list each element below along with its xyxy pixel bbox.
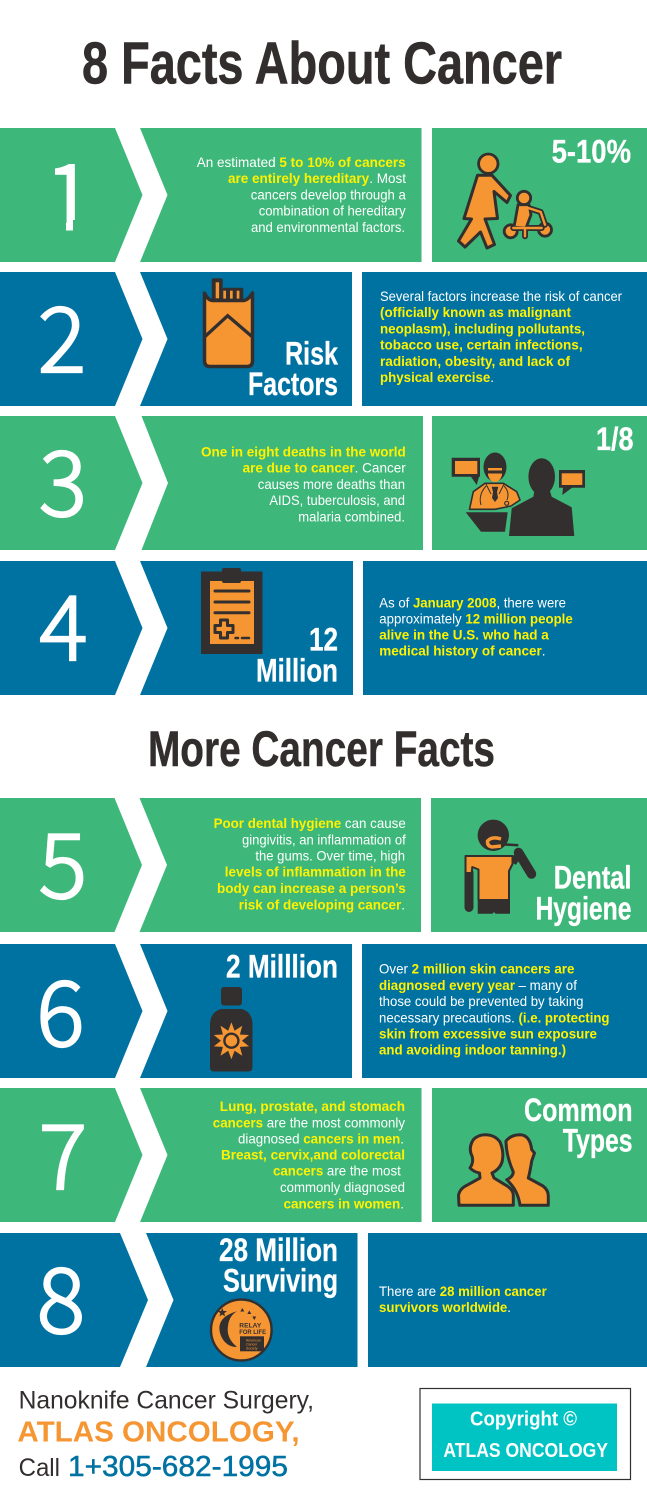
footer: contact details: Call: [19, 1454, 60, 1482]
text block: fact 7: [140, 1088, 422, 1222]
text block: fact 6: skin from excessive sun exposure: [379, 1026, 597, 1042]
stat panel: 1/8: [432, 416, 647, 550]
text block: fact 6: diagnosed every year – many of: [379, 977, 577, 993]
text block: fact 3: [142, 416, 423, 550]
icon: sunscreen bottle: [210, 987, 252, 1072]
copyright box: [420, 1388, 630, 1480]
icon: relay for life badge: RELAY: [239, 1322, 262, 1329]
text block: fact 5: risk of developing cancer.: [239, 896, 405, 912]
number 3 arrow: 3: [39, 412, 87, 542]
stat panel: 5-10%: 5-10%: [552, 134, 631, 170]
panel: fact 3: [0, 412, 647, 550]
copyright box: ATLAS ONCOLOGY: [443, 1440, 609, 1462]
text block: fact 1: and environmental factors.: [251, 219, 405, 235]
number 5 arrow: 5: [39, 794, 87, 924]
heading panel: 28 million surviving: 28 Million: [219, 1232, 338, 1268]
text block: fact 3: AIDS, tuberculosis, and: [269, 492, 405, 508]
text block: fact 8: [368, 1233, 647, 1367]
icon: relay for life badge: Society: [246, 1346, 258, 1350]
footer: contact details: ATLAS ONCOLOGY,: [17, 1417, 300, 1449]
icon: medical clipboard: [201, 568, 262, 654]
text block: fact 5: Poor dental hygiene can cause: [214, 815, 406, 831]
icon: relay for life badge: American: [246, 1338, 261, 1342]
panel: fact 5: [0, 794, 647, 932]
heading panel: 12 million: Million: [256, 653, 338, 689]
text block: fact 1: are entirely hereditary. Most: [228, 170, 406, 186]
number 2 arrow: 2: [38, 268, 86, 398]
number 6 arrow: 6: [36, 942, 85, 1072]
text block: fact 6: and avoiding indoor tanning.): [379, 1042, 566, 1058]
number 3 arrow: [0, 412, 142, 550]
panel: fact 8: [0, 1229, 647, 1367]
panel: fact 1: [0, 125, 647, 262]
panel: fact 2: [0, 268, 647, 406]
number 5 arrow: [0, 794, 142, 932]
icon: person with dental mirror: [464, 820, 532, 914]
panel: fact 7: [0, 1085, 647, 1222]
heading: more cancer facts: More Cancer Facts: [148, 721, 495, 777]
number 4 arrow: 4: [39, 556, 88, 686]
icon: relay for life badge: Cancer: [246, 1342, 258, 1346]
text block: fact 4: [363, 561, 647, 695]
text block: fact 3: malaria combined.: [298, 508, 405, 524]
number 7 arrow: [0, 1085, 142, 1222]
text block: fact 3: causes more deaths than: [258, 476, 405, 492]
text block: fact 7: cancers are the most commonly: [213, 1114, 405, 1130]
text block: fact 4: alive in the U.S. who had a: [379, 627, 549, 643]
text block: fact 4: approximately 12 million people: [379, 611, 573, 627]
text block: fact 6: [362, 944, 647, 1078]
number 8 arrow: 8: [37, 1229, 85, 1359]
icon: cigarette pack: [204, 278, 252, 366]
icon: doctor and patient talking: [452, 452, 585, 536]
text block: fact 2: [362, 272, 647, 406]
text block: fact 7: cancers in women.: [284, 1195, 404, 1211]
text block: fact 6: Over 2 million skin cancers are: [379, 961, 575, 977]
text block: fact 1: combination of hereditary: [259, 202, 406, 218]
footer: contact details: 1+305-682-1995: [68, 1451, 288, 1483]
text block: fact 5: the gums. Over time, high: [255, 848, 405, 864]
text block: fact 1: [140, 128, 422, 262]
text block: fact 6: those could be prevented by taking: [379, 993, 584, 1009]
text block: fact 2: neoplasm), including pollutants,: [380, 320, 585, 336]
copyright box: Copyright ©: [470, 1409, 577, 1431]
heading panel: risk factors: Factors: [248, 366, 338, 402]
text block: fact 7: diagnosed cancers in men.: [238, 1130, 404, 1146]
number 4 arrow: [0, 556, 142, 695]
text block: fact 1: cancers develop through a: [251, 186, 406, 202]
text block: fact 2: Several factors increase the risk of cancer: [380, 288, 622, 304]
text block: fact 3: are due to cancer. Cancer: [243, 460, 406, 476]
text block: fact 1: An estimated 5 to 10% of cancers: [197, 154, 406, 170]
heading panel: 2 million: [140, 944, 352, 1078]
footer: contact details: Nanoknife Cancer Surgery,: [19, 1386, 314, 1414]
icon: woman walking with child on tricycle: [458, 154, 552, 248]
text block: fact 5: [140, 798, 421, 932]
text block: fact 5: gingivitis, an inflammation of: [242, 831, 406, 847]
text block: fact 5: body can increase a person’s: [217, 880, 406, 896]
text block: fact 2: (officially known as malignant: [380, 304, 571, 320]
heading panel: 28 million surviving: Surviving: [223, 1263, 338, 1299]
heading panel: 28 million surviving: [146, 1232, 358, 1367]
text block: fact 2: physical exercise.: [380, 369, 494, 385]
icon: relay for life badge: [211, 1300, 272, 1360]
number 7 arrow: 7: [39, 1085, 87, 1215]
text block: fact 8: survivors worldwide.: [379, 1299, 511, 1315]
heading panel: 12 million: 12: [309, 622, 338, 658]
text block: fact 4: medical history of cancer.: [379, 643, 546, 659]
text block: fact 8: There are 28 million cancer: [379, 1283, 547, 1299]
text block: fact 2: tobacco use, certain infections,: [380, 336, 583, 352]
number 1 arrow: [0, 125, 142, 262]
stat panel: 1/8: 1/8: [596, 421, 634, 457]
text block: fact 7: cancers are the most: [273, 1163, 401, 1179]
panel: fact 6: [0, 942, 647, 1078]
text block: fact 4: As of January 2008, there were: [379, 594, 566, 610]
text block: fact 2: radiation, obesity, and lack of: [380, 353, 570, 369]
text block: fact 7: Lung, prostate, and stomach: [220, 1098, 405, 1114]
text block: fact 7: Breast, cervix,and colorectal: [221, 1146, 405, 1162]
heading panel: risk factors: [140, 272, 352, 406]
stat panel: dental hygiene: [431, 798, 647, 932]
number 6 arrow: [0, 942, 142, 1078]
heading panel: 12 million: [140, 561, 353, 695]
text block: fact 5: levels of inflammation in the: [225, 864, 406, 880]
heading panel: risk factors: Risk: [285, 335, 338, 371]
number 8 arrow: [0, 1229, 148, 1367]
number 2 arrow: [0, 268, 142, 406]
text block: fact 6: necessary precautions. (i.e. protecting: [379, 1009, 610, 1025]
heading panel: 2 million: 2 Milllion: [226, 948, 338, 984]
stat panel: 5-10%: [432, 128, 647, 262]
panel: fact 4: [0, 556, 647, 695]
text block: fact 7: commonly diagnosed: [280, 1179, 405, 1195]
icon: relay for life badge: FOR LIFE: [239, 1329, 267, 1336]
stat panel: common types: [432, 1088, 647, 1222]
number 1 arrow: 1: [45, 125, 93, 255]
icon: two people busts: [458, 1135, 548, 1205]
text block: fact 3: One in eight deaths in the world: [201, 443, 406, 459]
footer: contact details: [17, 1386, 314, 1483]
